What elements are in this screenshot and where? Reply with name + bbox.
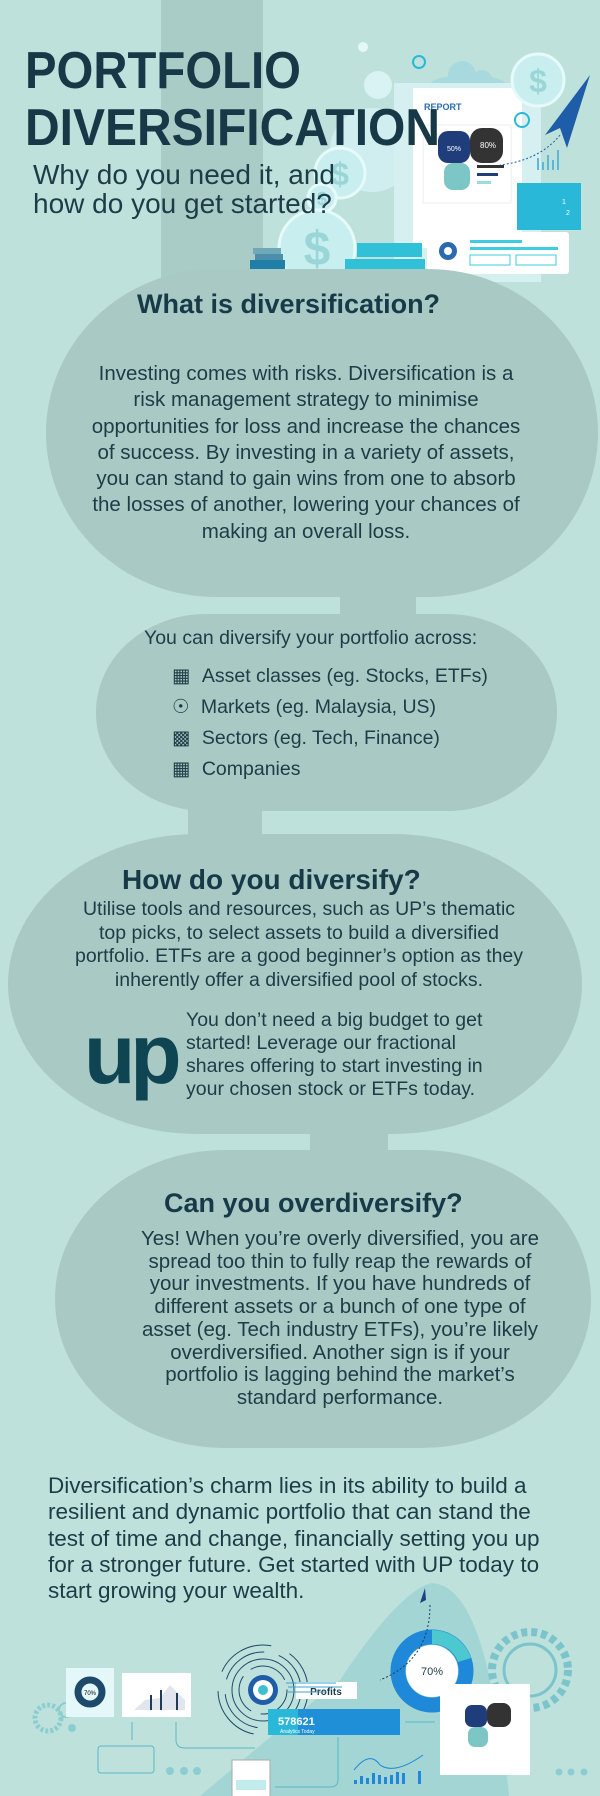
chart card — [122, 1673, 191, 1717]
bottom illustration: 578621 — [278, 1716, 315, 1728]
radar — [218, 1645, 308, 1735]
paper plane — [545, 75, 590, 148]
body text: the losses of another, lowering your chances of — [92, 493, 520, 516]
blue card — [517, 183, 581, 230]
list — [172, 665, 488, 780]
list: ▩ Sectors (eg. Tech, Finance) — [172, 727, 440, 749]
small bars — [537, 150, 559, 170]
coin stack — [330, 243, 425, 290]
list: ▦ Companies — [172, 758, 300, 780]
neck connectors — [340, 580, 416, 630]
body text: top picks, to select assets to build a diversified — [99, 922, 499, 944]
panel: diversify across — [96, 614, 557, 811]
closing text: resilient and dynamic portfolio that can stand the — [48, 1499, 531, 1524]
gear — [492, 1632, 568, 1708]
subtitle — [33, 159, 335, 219]
bottom illustration: Analytics Today — [280, 1729, 315, 1735]
body text: portfolio is lagging behind the market’s — [165, 1363, 515, 1386]
profits label — [296, 1682, 357, 1699]
bottom illustration: 70% — [421, 1666, 443, 1678]
body text: risk management strategy to minimise — [133, 388, 479, 411]
dots — [166, 1767, 588, 1776]
title: PORTFOLIO — [25, 42, 301, 100]
body text — [141, 1227, 539, 1409]
coins — [279, 54, 564, 286]
body text: portfolio. ETFs are a good beginner’s option as they — [75, 945, 523, 967]
body text: Investing comes with risks. Diversification is a — [99, 362, 513, 385]
small donut card — [66, 1668, 114, 1717]
header illustration: 1 — [562, 199, 566, 206]
heading: Can you overdiversify? — [164, 1188, 463, 1218]
callout text — [186, 1009, 483, 1100]
list: ▦ Asset classes (eg. Stocks, ETFs) — [172, 665, 488, 687]
bottom illustration: Profits — [310, 1687, 342, 1698]
callout text: your chosen stock or ETFs today. — [186, 1078, 475, 1100]
heading: How do you diversify? — [122, 864, 421, 895]
body text: different assets or a bunch of one type of — [154, 1295, 526, 1318]
logo: up: up — [84, 1007, 177, 1101]
body text: standard performance. — [237, 1386, 443, 1409]
body text: inherently offer a diversified pool of stocks. — [115, 968, 483, 990]
body text: opportunities for loss and increase the chances — [92, 415, 520, 438]
closing text — [48, 1473, 540, 1603]
header illustration: REPORT — [424, 102, 462, 112]
closing text: Diversification’s charm lies in its ability to build a — [48, 1473, 527, 1498]
bars — [354, 1771, 421, 1784]
books & leaf — [250, 260, 285, 290]
bottom card — [427, 232, 569, 274]
background band — [161, 0, 263, 300]
title — [25, 42, 440, 155]
document — [232, 1760, 270, 1796]
banner — [268, 1709, 400, 1735]
body text: overdiversified. Another sign is if your — [170, 1341, 510, 1364]
closing text: start growing your wealth. — [48, 1578, 304, 1603]
bottom illustration: 70% — [84, 1691, 97, 1697]
callout text: started! Leverage our fractional — [186, 1032, 456, 1054]
header illustration: 80% — [480, 141, 496, 150]
closing text: for a stronger future. Get started with UP today to — [48, 1552, 539, 1577]
callout text: shares offering to start investing in — [186, 1055, 483, 1077]
body text: your investments. If you have hundreds of — [150, 1272, 530, 1295]
body text: spread too thin to fully reap the rewards of — [149, 1250, 531, 1273]
panel: how do you diversify — [8, 834, 582, 1134]
header illustration: $ — [529, 63, 547, 99]
header illustration: $ — [317, 189, 327, 209]
bottom illustration — [32, 1583, 588, 1796]
body text: Yes! When you’re overly diversified, you are — [141, 1227, 539, 1250]
list: ☉ Markets (eg. Malaysia, US) — [172, 696, 436, 718]
subtitle: how do you get started? — [33, 188, 332, 219]
header illustration: 2 — [566, 210, 570, 217]
body text: of success. By investing in a variety of assets, — [97, 441, 515, 464]
body text: you can stand to gain wins from one to absorb — [96, 467, 516, 490]
cloud — [430, 61, 506, 95]
intro text: You can diversify your portfolio across: — [144, 627, 477, 649]
body text — [75, 898, 523, 990]
panel: overdiversify — [55, 1150, 591, 1448]
body text: Utilise tools and resources, such as UP’s thematic — [83, 898, 515, 920]
panel: what is diversification — [46, 269, 598, 597]
header illustration: $ — [304, 223, 331, 276]
header illustration — [250, 42, 590, 282]
donut 70% — [398, 1637, 466, 1705]
body text: asset (eg. Tech industry ETFs), you’re likely — [142, 1318, 538, 1341]
body text: making an overall loss. — [202, 520, 410, 543]
callout text: You don’t need a big budget to get — [186, 1009, 482, 1031]
message card — [98, 1746, 154, 1773]
subtitle: Why do you need it, and — [33, 159, 335, 190]
header illustration: 50% — [447, 146, 461, 153]
body text — [92, 362, 520, 543]
clipboard — [394, 83, 541, 282]
closing text: test of time and change, financially setting you up — [48, 1526, 540, 1551]
heading: What is diversification? — [137, 289, 440, 319]
report card — [440, 1684, 530, 1775]
header illustration: $ — [331, 156, 349, 192]
